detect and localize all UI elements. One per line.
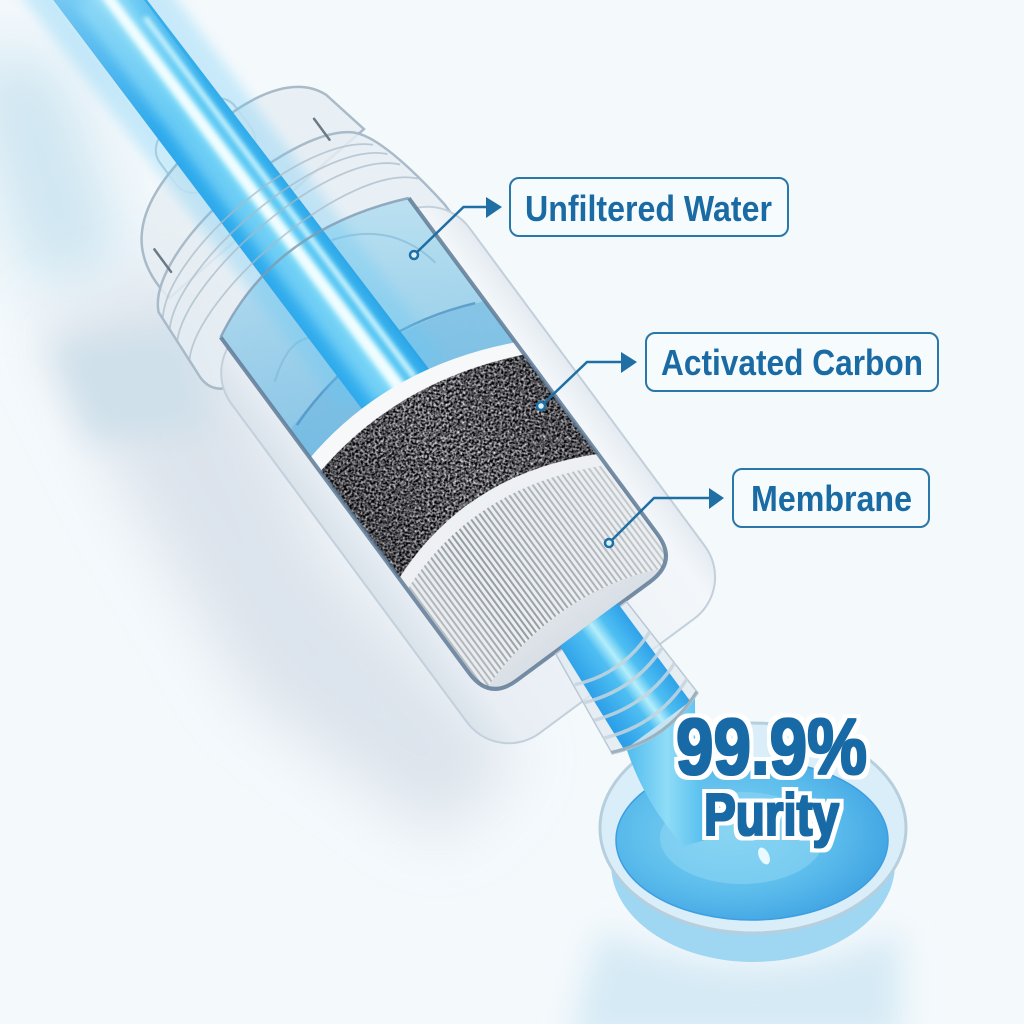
label text: Activated Carbon — [661, 342, 923, 383]
threaded collar — [122, 94, 457, 400]
chamber outline — [221, 198, 678, 701]
water highlight — [756, 846, 772, 866]
water stream — [0, 0, 458, 452]
label box — [646, 333, 938, 391]
filter stack — [310, 342, 664, 687]
filter cartridge — [0, 0, 736, 770]
dish wall — [611, 766, 895, 962]
end cap and white spacers — [312, 342, 660, 687]
outlet neck — [542, 597, 704, 763]
chamber top arc — [204, 176, 409, 337]
water ripple — [660, 792, 824, 884]
purity percentage: 99.9% — [676, 702, 867, 791]
pouring stream — [622, 695, 712, 846]
slit marks — [148, 119, 337, 272]
label: membrane — [605, 469, 929, 547]
label text: Unfiltered Water — [525, 188, 772, 229]
leader line — [410, 197, 502, 259]
label box — [733, 469, 929, 527]
inlet tube — [147, 89, 264, 202]
cartridge body — [200, 186, 736, 764]
label: activated carbon — [537, 333, 938, 410]
label text: Membrane — [751, 478, 912, 519]
dish rim — [600, 723, 906, 933]
label: unfiltered water — [410, 178, 788, 259]
label box — [510, 178, 788, 236]
purity word: Purity — [704, 782, 839, 848]
collecting dish — [600, 723, 906, 962]
leader line — [605, 488, 724, 547]
leader line — [537, 352, 637, 410]
unfiltered water chamber — [221, 198, 516, 458]
upper cap — [102, 55, 376, 299]
activated carbon layer — [320, 354, 598, 578]
callout: purity figure — [676, 702, 867, 848]
collar thread lines — [133, 110, 424, 360]
purified water — [616, 760, 888, 920]
membrane layer — [408, 466, 664, 686]
